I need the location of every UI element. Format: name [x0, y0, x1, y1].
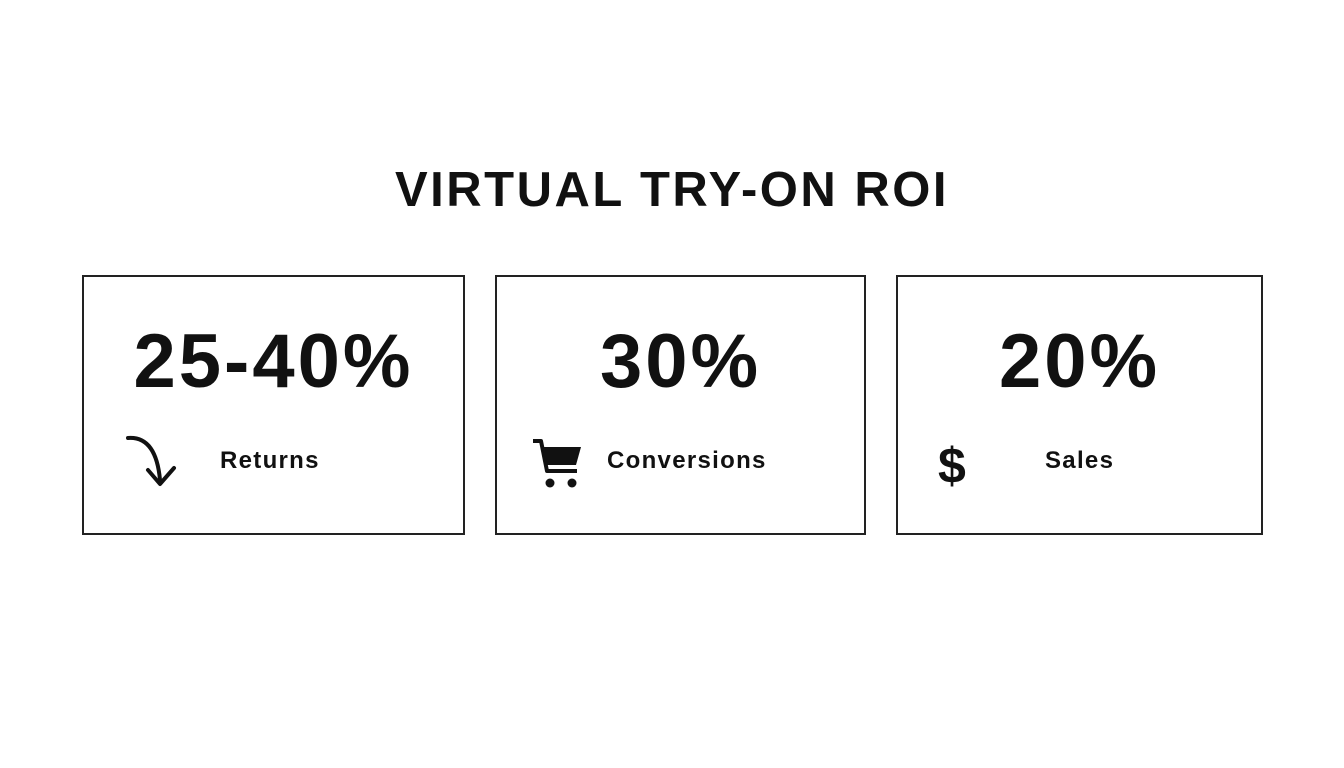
panel: sales: [896, 275, 1263, 535]
label: sales: Sales: [1045, 447, 1114, 474]
icon: curved down arrow: [126, 436, 176, 486]
label: returns: Returns: [220, 447, 320, 474]
number: returns: 25-40%: [134, 319, 413, 404]
icon: cart: [533, 439, 581, 488]
title: VIRTUAL TRY-ON ROI: [395, 163, 949, 217]
number: conversions: 30%: [600, 319, 761, 404]
panel: conversions: [495, 275, 866, 535]
label: conversions: Conversions: [607, 447, 767, 474]
panel: returns: [82, 275, 465, 535]
icon: dollar: $: [938, 438, 966, 494]
number: sales: 20%: [999, 319, 1160, 404]
